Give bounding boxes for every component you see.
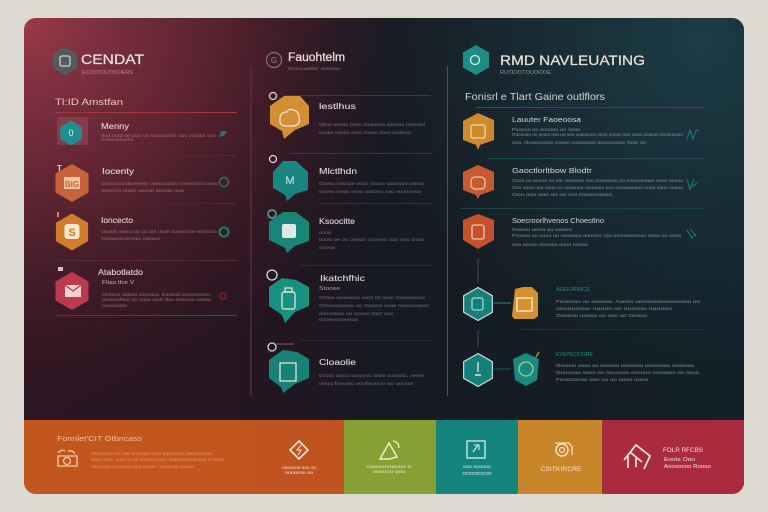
left row 3: Oooooooeooo ooooo xyxy=(101,236,161,241)
flow connector xyxy=(477,258,479,347)
middle row 4: oooooooo oo ooooo ooot ooo xyxy=(319,311,394,316)
middle row 4: Ooooo oooeoooo oooo oo oooo ooooooeooo xyxy=(319,295,426,300)
tile: orange xyxy=(282,441,316,475)
right row 5: Foooooooo ooo oo oo oooo oooo xyxy=(556,377,649,382)
tile: red: FOLR RFCBS xyxy=(663,447,704,454)
left header xyxy=(53,47,144,76)
middle row 3: Ksoocitte xyxy=(319,216,355,226)
middle row 2: M xyxy=(285,175,295,187)
middle row 1: Oeoo ooooo oooo oootoooo oooooo oooeoot xyxy=(319,122,426,127)
middle row 5: Cloaolie xyxy=(319,357,356,367)
middle row 4: Ikatchfhic xyxy=(320,273,366,283)
right row 2: Ooo oooo ooo oooo oo ooooooo ooooooo ooo oooooooooo oooo oooo ooooo xyxy=(512,185,683,190)
middle row 3: ooooo xyxy=(319,245,336,250)
left row 1: Menny xyxy=(101,121,130,131)
right row 3: Soecroorlhvenos Choestlno xyxy=(512,216,604,225)
left row 1: oeoeoooctd xyxy=(101,137,134,142)
left row 3: Ioncecto xyxy=(101,215,133,225)
left row 3: S xyxy=(68,227,76,239)
right row 5: Oooooo oooo oo oooooo ooooooo oooooooo ooooooo xyxy=(556,363,695,368)
middle row 1: lestlhus xyxy=(319,101,356,111)
left row 2: oeoooo oooo oeooo eoooo ooo xyxy=(101,188,185,193)
orange summary block: Oooooooo oo ooo oo oooo oooo oooooooo oooooooooo xyxy=(91,451,213,456)
left row 1: 0 xyxy=(68,128,74,138)
tile: red: Eoots Ooo xyxy=(664,457,695,463)
right row 4: Foooooo oo oooooo. Aoooo oooooooooooooooo oo xyxy=(556,299,701,304)
column dividers xyxy=(250,66,448,396)
middle row 4: oooooooooooo xyxy=(319,317,359,322)
left row 2: Iocenty xyxy=(102,166,135,176)
right row 2 xyxy=(460,165,704,209)
right header: RMD NAVLEUATING xyxy=(500,52,645,68)
tile: teal xyxy=(462,441,492,476)
left row 1: ded ootd oo ooo oo ooooootec ooc ooooot oot xyxy=(101,133,216,138)
tile: green xyxy=(367,441,412,474)
left row 2 xyxy=(55,164,237,204)
left header: ECOOTOUTOOIERS xyxy=(82,70,134,76)
right row 1: Ooooooo oo oooot ooo oo ooo oooooooo oooo ooooo ooo oooo oooooo oooeooooo xyxy=(512,132,683,137)
right row 2: Ooo ooo ooo oo oo oot Ooooooooo xyxy=(512,192,613,197)
left row 2: T xyxy=(57,164,62,173)
tile: teal: ooo oooooo xyxy=(463,464,492,469)
right row 3 xyxy=(463,214,696,249)
middle header xyxy=(266,52,345,72)
right row 4: Oooooo ooooo oo ooo oo Ooooo xyxy=(556,313,648,318)
right row 5 xyxy=(464,352,700,386)
right row 1: Fooooo oo oooooo oo oooo xyxy=(512,127,581,132)
tile: orange: ooooooo oo xyxy=(285,470,314,475)
left header: CENDAT xyxy=(81,51,144,67)
right row 3: Fooooo oo oooo oo ooooooo oooooo. Ioo ooooooooooo oooo oo oooo xyxy=(512,233,682,238)
middle row 2: Mlctlhdn xyxy=(319,166,357,176)
orange summary block: oooo ooo oo ooooo ooo ooooo. ooooo oo ooooo xyxy=(91,464,193,469)
tile: amber: CSITKIRCRE xyxy=(540,466,582,473)
orange summary block: Fonnlet'CIT Gtbncass xyxy=(57,436,143,443)
middle row 4: Stoose xyxy=(319,286,340,292)
right section heading: Fonisrl e Tlart Gaine outlflors xyxy=(465,92,605,103)
left row 2: BIG xyxy=(65,180,79,189)
middle row 2 xyxy=(270,156,431,204)
panel: right column xyxy=(460,45,704,386)
middle row 1: oooeo ooooo oooo ooooo oooo ooofooo xyxy=(319,130,411,135)
middle row 2: Ooeoo oooooe oooo ooooo ooooooo ooooo xyxy=(319,181,425,186)
right row 2: Gaoctlorltbow Blodtr xyxy=(512,166,593,175)
left row 4: Oefofoo oolooo ooooooo. Eooeod oooooooooo xyxy=(102,292,210,297)
tile: green: oooooo ooo xyxy=(372,469,406,474)
right header xyxy=(463,45,645,76)
orange summary block xyxy=(57,436,224,469)
panel: left column xyxy=(53,47,237,316)
tile: red xyxy=(624,445,711,470)
left row 4 xyxy=(55,267,237,316)
left row 2: oooooooootteeeeoo oooooootoo ooooootoo oeoo xyxy=(101,181,218,186)
tile: orange: ooeoooo ooo oo xyxy=(282,465,316,470)
middle row 5 xyxy=(268,343,424,393)
left row 4: Atabotlatdo xyxy=(98,267,143,277)
panel: bottom band xyxy=(57,436,711,476)
left row 4: oooooooto xyxy=(102,303,128,308)
right row 4 xyxy=(464,287,704,330)
right row 1 xyxy=(463,113,704,159)
middle header: Fauohtelm xyxy=(288,52,345,64)
tile: green: ooooooooooo o xyxy=(367,464,412,469)
tile: red: Aoosoooo Roooo xyxy=(664,464,711,470)
right row 1: Lauuter Faoeoosa xyxy=(512,115,582,124)
middle row 3 xyxy=(268,210,431,266)
right row 4: AGGORIRCE xyxy=(556,287,590,293)
middle row 4 xyxy=(267,270,431,341)
middle row 3: oooo oe oo ooooo oooooo ooo ooo oooo xyxy=(319,237,425,242)
left row 3: Ooootl ooeoo oo oo oot tlooe oooooooe ooooooo xyxy=(101,229,218,234)
middle row 2: oooeo oooo oooo oooooo ooo oooooooo xyxy=(319,189,422,194)
orange summary block: Nooo oooo. oooo oo oo oooooo oooo. ooooooooooooooo oo oooo xyxy=(91,457,224,462)
left section heading: Tl:ID Amstfan xyxy=(55,97,123,108)
right row 1: ooo. Ooooooooo ooooo oooooooo ooooooooo Tooo oo xyxy=(512,140,647,145)
right header: RUTIOOTOUOOOE xyxy=(500,70,552,76)
right row 4: ooooooooo ooooo oo oooooo oooooo xyxy=(556,306,673,311)
middle row 1 xyxy=(270,92,431,154)
middle row 5: oooo fooooo ooofooooo oo ooooo xyxy=(319,381,414,386)
left row 1 xyxy=(57,117,237,156)
left row 4: oooeoofooo oo oooo ooot oloo ootoooo oooeo xyxy=(102,297,212,302)
right row 2: Oooo oo ooooo oo oot ooooooo ooo oooooooo oo oooooooooo oooo ooooo xyxy=(512,178,683,183)
middle header: G xyxy=(271,56,277,65)
middle header: tsoouatlsr soooe xyxy=(288,66,340,72)
panel: middle column xyxy=(266,52,431,393)
middle row 4: Oooeooooooo oo Vooooo oooe oooooooeoo xyxy=(319,303,430,308)
middle row 3: oooo xyxy=(319,230,332,235)
tile: teal: OOOOOOOO xyxy=(462,471,492,476)
right row 3: Ooooo oooo oo ooooo xyxy=(512,227,573,232)
left row 4: Fitao tlce V xyxy=(102,280,134,286)
right row 5: Ooooooo oooo oo ooooooo oooooo ooooooo oo oooo xyxy=(556,370,700,375)
middle row 5: Ooooo ooooo ooooooo, Oooe ooooooo. oeoeo xyxy=(319,373,424,378)
left row 3 xyxy=(56,212,237,261)
right row 5: EVEPECICGRE xyxy=(556,352,593,358)
right row 3: ooo ooooo oooooo oooo ooooo xyxy=(512,242,589,247)
tile: amber xyxy=(540,443,582,473)
